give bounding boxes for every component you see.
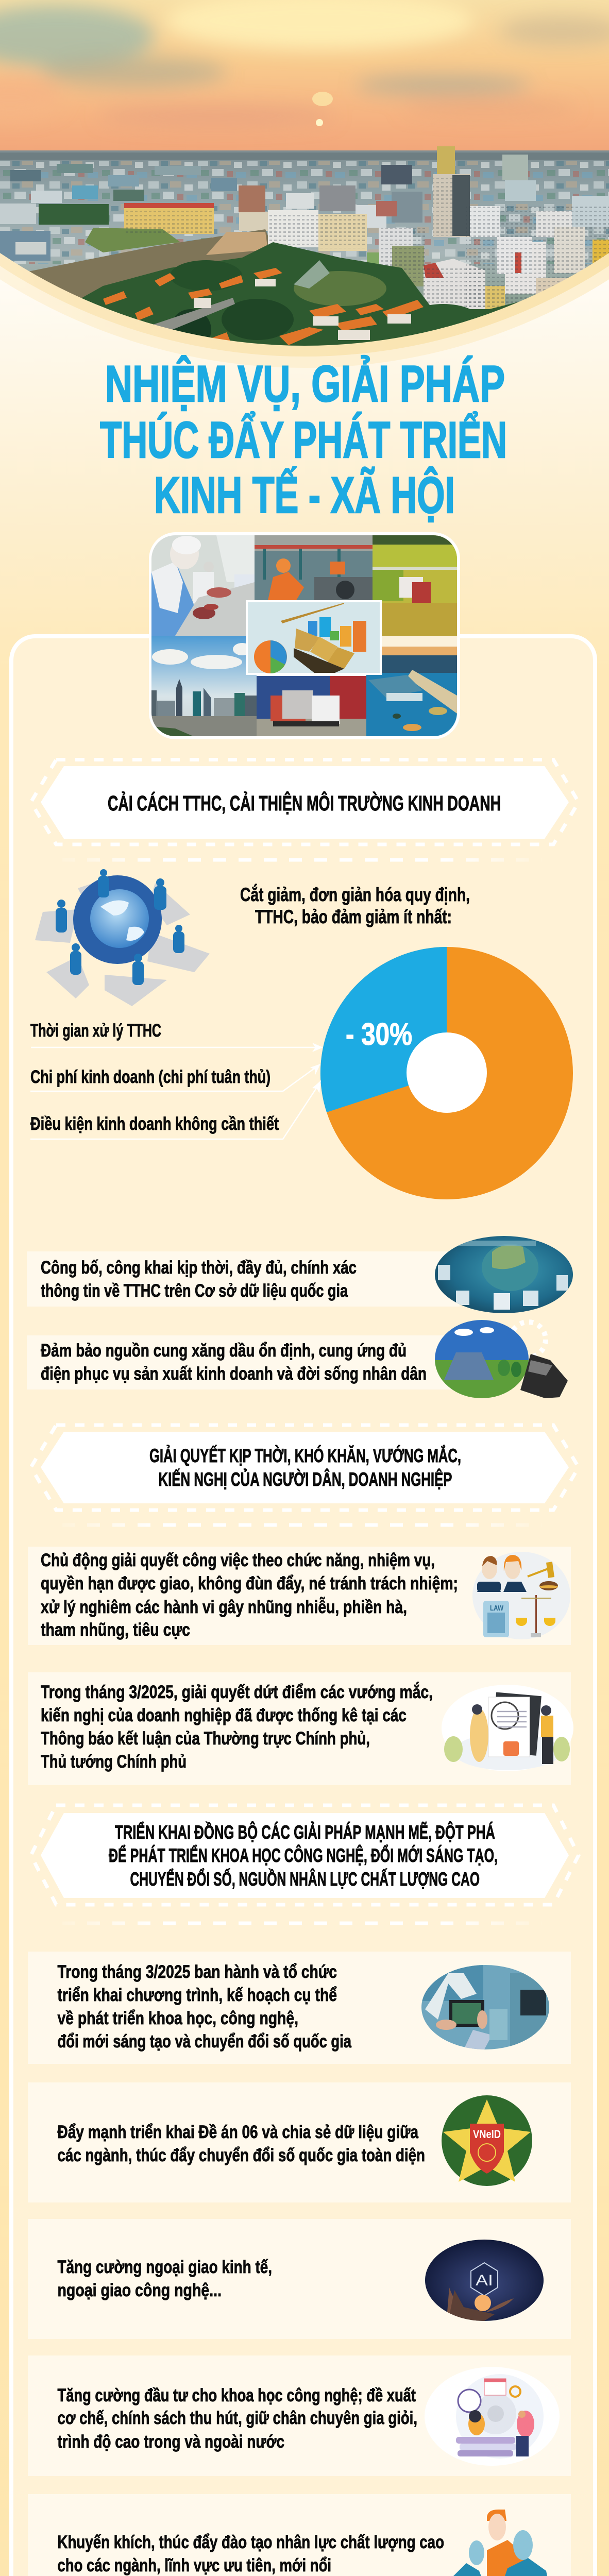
photo: GDP xyxy=(246,600,382,675)
image: AI hand xyxy=(425,2240,544,2324)
intro text: TTHC, bảo đảm giảm ít nhất: xyxy=(255,906,452,927)
item: training: Khuyến khích, thúc đẩy đào tạo nhân lực chất lượng cao xyxy=(58,2532,444,2552)
image: robot arm and tablet xyxy=(421,1965,550,2049)
item: science programme: đổi mới sáng tạo và chuyển đổi số quốc gia xyxy=(58,2031,351,2052)
item: proactive work: quyền hạn được giao, không đùn đẩy, né tránh trách nhiệm; xyxy=(41,1573,458,1594)
item: science programme: Trong tháng 3/2025 ban hành và tổ chức xyxy=(58,1962,337,1982)
orange roofs, decorative grouping xyxy=(103,268,424,348)
item: energy supply: điện phục vụ sản xuất kinh doanh và đời sống nhân dân xyxy=(41,1364,427,1384)
title: KINH TẾ - XÃ HỘI xyxy=(154,466,455,523)
section header 2: KIẾN NGHỊ CỦA NGƯỜI DÂN, DOANH NGHIỆP xyxy=(159,1468,452,1490)
image: AI hand: AI xyxy=(476,2272,493,2289)
item: training xyxy=(28,2494,571,2576)
item: science programme: triển khai chương trình, kế hoạch cụ thể xyxy=(58,1985,337,2005)
item: training: cho các ngành, lĩnh vực ưu tiên, mới nổi xyxy=(58,2555,331,2575)
section header 2 xyxy=(31,1425,579,1510)
item: public information: Công bố, công khai kịp thời, đầy đủ, chính xác xyxy=(41,1258,357,1278)
donut chart: -30% xyxy=(320,947,573,1199)
icon: document review xyxy=(442,1685,573,1771)
photo collage xyxy=(149,532,460,739)
item: diplomacy: ngoại giao công nghệ... xyxy=(58,2280,222,2300)
chart labels with arrows: Chi phí kinh doanh (chi phí tuân thủ) xyxy=(30,1067,270,1087)
image: data network globe xyxy=(435,1236,573,1313)
section header 2: GIẢI QUYẾT KỊP THỜI, KHÓ KHĂN, VƯỚNG MẮC, xyxy=(149,1445,461,1466)
item: investing in science: Tăng cường đầu tư cho khoa học công nghệ; đề xuất xyxy=(58,2385,416,2405)
texture buildings, decorative grouping xyxy=(0,152,609,317)
intro text: Cắt giảm, đơn giản hóa quy định, xyxy=(240,884,470,905)
photo: Hoi An river xyxy=(366,636,457,736)
item: Project 06: Đẩy mạnh triển khai Đề án 06 và chia sẻ dữ liệu giữa xyxy=(58,2122,418,2142)
chart labels with arrows: Điều kiện kinh doanh không cần thiết xyxy=(30,1114,279,1134)
item: energy supply: Đảm bảo nguồn cung xăng dầu ổn định, cung ứng đủ xyxy=(41,1341,407,1361)
icon: green energy bulb xyxy=(435,1320,568,1401)
donut chart: -30%: - 30% xyxy=(346,1017,412,1052)
item: resolve obstacles: Trong tháng 3/2025, giải quyết dứt điểm các vướng mắc, xyxy=(41,1682,433,1702)
intro text xyxy=(240,884,470,927)
photo: city skyline xyxy=(151,636,257,736)
icon: target and experts xyxy=(425,2367,560,2466)
item: energy supply xyxy=(27,1335,454,1389)
item: diplomacy: Tăng cường ngoại giao kinh tế, xyxy=(58,2257,272,2277)
section header 1 xyxy=(31,759,579,844)
hero: cream arc bands xyxy=(0,0,609,368)
icon: VNeID emblem: VNeID xyxy=(473,2128,501,2141)
photo: factory worker xyxy=(255,535,373,600)
item: resolve obstacles: Thủ tướng Chính phủ xyxy=(41,1752,187,1772)
item: proactive work: Chủ động giải quyết công việc theo chức năng, nhiệm vụ, xyxy=(41,1550,435,1570)
item: investing in science: cơ chế, chính sách thu hút, giữ chân chuyên gia giỏi, xyxy=(58,2408,417,2428)
title xyxy=(100,355,507,523)
photo: rice field xyxy=(373,535,457,636)
item: resolve obstacles: Thông báo kết luận của Thường trực Chính phủ, xyxy=(41,1728,370,1749)
item: investing in science: trình độ cao trong và ngoài nước xyxy=(58,2432,284,2452)
chart labels with arrows xyxy=(30,1021,323,1139)
icon: law and people xyxy=(472,1552,570,1639)
icon: business team xyxy=(428,2510,550,2576)
item: Project 06: các ngành, thúc đẩy chuyển đổi số quốc gia toàn diện xyxy=(58,2145,425,2165)
photo: meat factory xyxy=(151,535,255,636)
item: investing in science xyxy=(28,2355,571,2476)
item: proactive work: tham nhũng, tiêu cực xyxy=(41,1620,190,1640)
item: diplomacy xyxy=(28,2219,571,2339)
photo: container truck xyxy=(257,676,366,736)
item: proactive work: xử lý nghiêm các hành vi gây nhũng nhiễu, phiền hà, xyxy=(41,1597,407,1617)
icon: VNeID emblem xyxy=(442,2095,532,2186)
item: science programme: về phát triển khoa học, công nghệ, xyxy=(58,2008,298,2028)
section header 3 xyxy=(31,1805,579,1905)
icon: law and people: LAW xyxy=(490,1604,504,1613)
item: public information: thông tin về TTHC trên Cơ sở dữ liệu quốc gia xyxy=(41,1281,348,1301)
item: resolve obstacles: kiến nghị của doanh nghiệp đã được thống kê tại các xyxy=(41,1705,407,1725)
main panel xyxy=(11,636,595,2576)
item: public information xyxy=(27,1251,460,1307)
item: proactive work xyxy=(28,1547,571,1645)
icon: globe with puzzle pieces and people xyxy=(35,869,210,1006)
item: resolve obstacles xyxy=(28,1672,571,1785)
item: science programme xyxy=(28,1952,571,2064)
item: Project 06 xyxy=(28,2082,571,2202)
hero photo: city at sunset xyxy=(0,0,609,357)
chart labels with arrows: Thời gian xử lý TTHC xyxy=(30,1021,161,1041)
